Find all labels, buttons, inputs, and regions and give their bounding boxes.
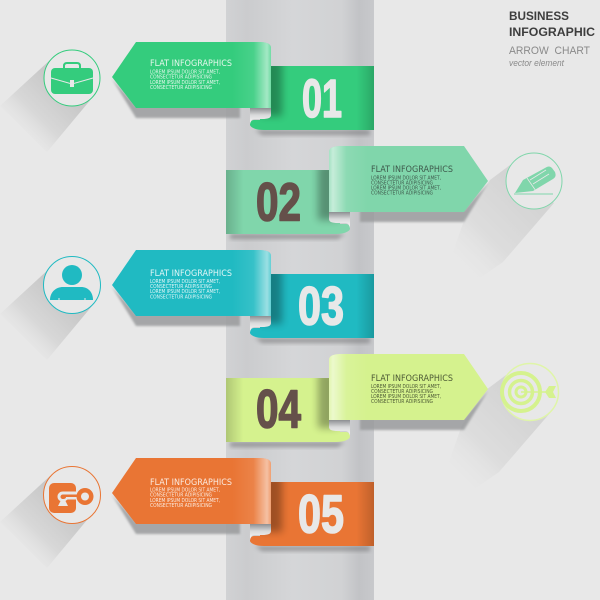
number 04: 04 (256, 380, 301, 440)
banner text 3: LOREM IPSUM DOLOR SIT AMET, (150, 289, 220, 295)
banner text 5 (150, 478, 232, 509)
icon: briefcase (44, 50, 100, 106)
item 2: mint right arrow (226, 146, 562, 260)
banner text 1 (150, 59, 232, 91)
number 05: 05 (298, 484, 344, 544)
lower ribbon shadow 4 (230, 442, 345, 447)
title block: vector element (509, 58, 564, 68)
banner text 2: LOREM IPSUM DOLOR SIT AMET, (371, 176, 441, 182)
banner shadow 1 (112, 79, 240, 118)
banner text 4: FLAT INFOGRAPHICS (371, 374, 453, 384)
curl inside 1 (250, 108, 271, 124)
curl inside 3 (250, 316, 271, 332)
banner 2 (329, 146, 488, 212)
banner text 4 (371, 374, 453, 405)
item 4: lime right arrow (226, 354, 560, 472)
lower ribbon 2 (226, 164, 350, 234)
banner shadow 4 (360, 391, 488, 430)
banner text 1: LOREM IPSUM DOLOR SIT AMET, (150, 80, 220, 86)
banner text 3: CONSECTETUR ADIPISICING (150, 294, 212, 300)
banner text 3: CONSECTETUR ADIPISICING (150, 284, 212, 290)
item 1: green left arrow (0, 42, 374, 152)
banner text 5: LOREM IPSUM DOLOR SIT AMET, (150, 488, 220, 494)
lower ribbon 5 (250, 476, 374, 546)
title block: BUSINESS (509, 9, 569, 23)
lower ribbon 4 (226, 372, 350, 442)
long shadow 5 (0, 476, 92, 568)
curl inside 2 (329, 212, 350, 228)
banner text 1: CONSECTETUR ADIPISICING (150, 85, 212, 91)
lower ribbon 3 (250, 268, 374, 338)
item 3: teal left arrow (0, 250, 374, 360)
number 03: 03 (298, 276, 344, 336)
banner shadow 5 (112, 495, 240, 534)
banner text 4: CONSECTETUR ADIPISICING (371, 399, 433, 405)
banner 1 (112, 42, 271, 108)
banner text 5: FLAT INFOGRAPHICS (150, 478, 232, 488)
curl inside 4 (329, 420, 350, 436)
long shadow 4 (446, 375, 550, 495)
icon: pencil (506, 153, 562, 209)
banner 4 (329, 354, 488, 420)
lower ribbon shadow 5 (255, 546, 370, 551)
title block (509, 9, 595, 68)
banner text 5: CONSECTETUR ADIPISICING (150, 503, 212, 509)
lower ribbon shadow 2 (230, 234, 345, 239)
banner 3 (112, 250, 271, 316)
banner text 2: FLAT INFOGRAPHICS (371, 165, 453, 175)
number 01: 01 (302, 69, 342, 129)
icon: target (502, 364, 558, 420)
curl inside 5 (250, 524, 271, 540)
banner shadow 2 (360, 183, 488, 222)
banner text 3: FLAT INFOGRAPHICS (150, 269, 232, 279)
banner text 4: LOREM IPSUM DOLOR SIT AMET, (371, 384, 441, 390)
banner text 2: CONSECTETUR ADIPISICING (371, 190, 433, 196)
banner 5 (112, 458, 271, 524)
banner text 1: LOREM IPSUM DOLOR SIT AMET, (150, 70, 220, 76)
banner text 2: CONSECTETUR ADIPISICING (371, 180, 433, 186)
banner text 2: LOREM IPSUM DOLOR SIT AMET, (371, 186, 441, 192)
banner text 4: CONSECTETUR ADIPISICING (371, 389, 433, 395)
banner text 1: CONSECTETUR ADIPISICING (150, 74, 212, 80)
icon: person (44, 256, 100, 314)
long shadow 3 (0, 268, 92, 360)
banner shadow 3 (112, 287, 240, 326)
banner text 5: LOREM IPSUM DOLOR SIT AMET, (150, 498, 220, 504)
banner text 3 (150, 269, 232, 300)
banner text 3: LOREM IPSUM DOLOR SIT AMET, (150, 279, 220, 285)
long shadow 2 (450, 165, 554, 285)
title block: INFOGRAPHIC (509, 25, 595, 39)
lower ribbon shadow 1 (255, 130, 370, 135)
banner text 2 (371, 165, 453, 196)
lower ribbon shadow 3 (255, 338, 370, 343)
banner text 1: FLAT INFOGRAPHICS (150, 59, 232, 69)
icon: key GO (44, 466, 100, 524)
item 5: orange left arrow (0, 458, 374, 568)
number 02: 02 (256, 172, 301, 232)
banner text 5: CONSECTETUR ADIPISICING (150, 492, 212, 498)
title block: ARROW CHART (509, 45, 590, 57)
long shadow 1 (0, 60, 92, 152)
center column (226, 0, 374, 600)
lower ribbon 1 (250, 60, 374, 130)
banner text 4: LOREM IPSUM DOLOR SIT AMET, (371, 394, 441, 400)
